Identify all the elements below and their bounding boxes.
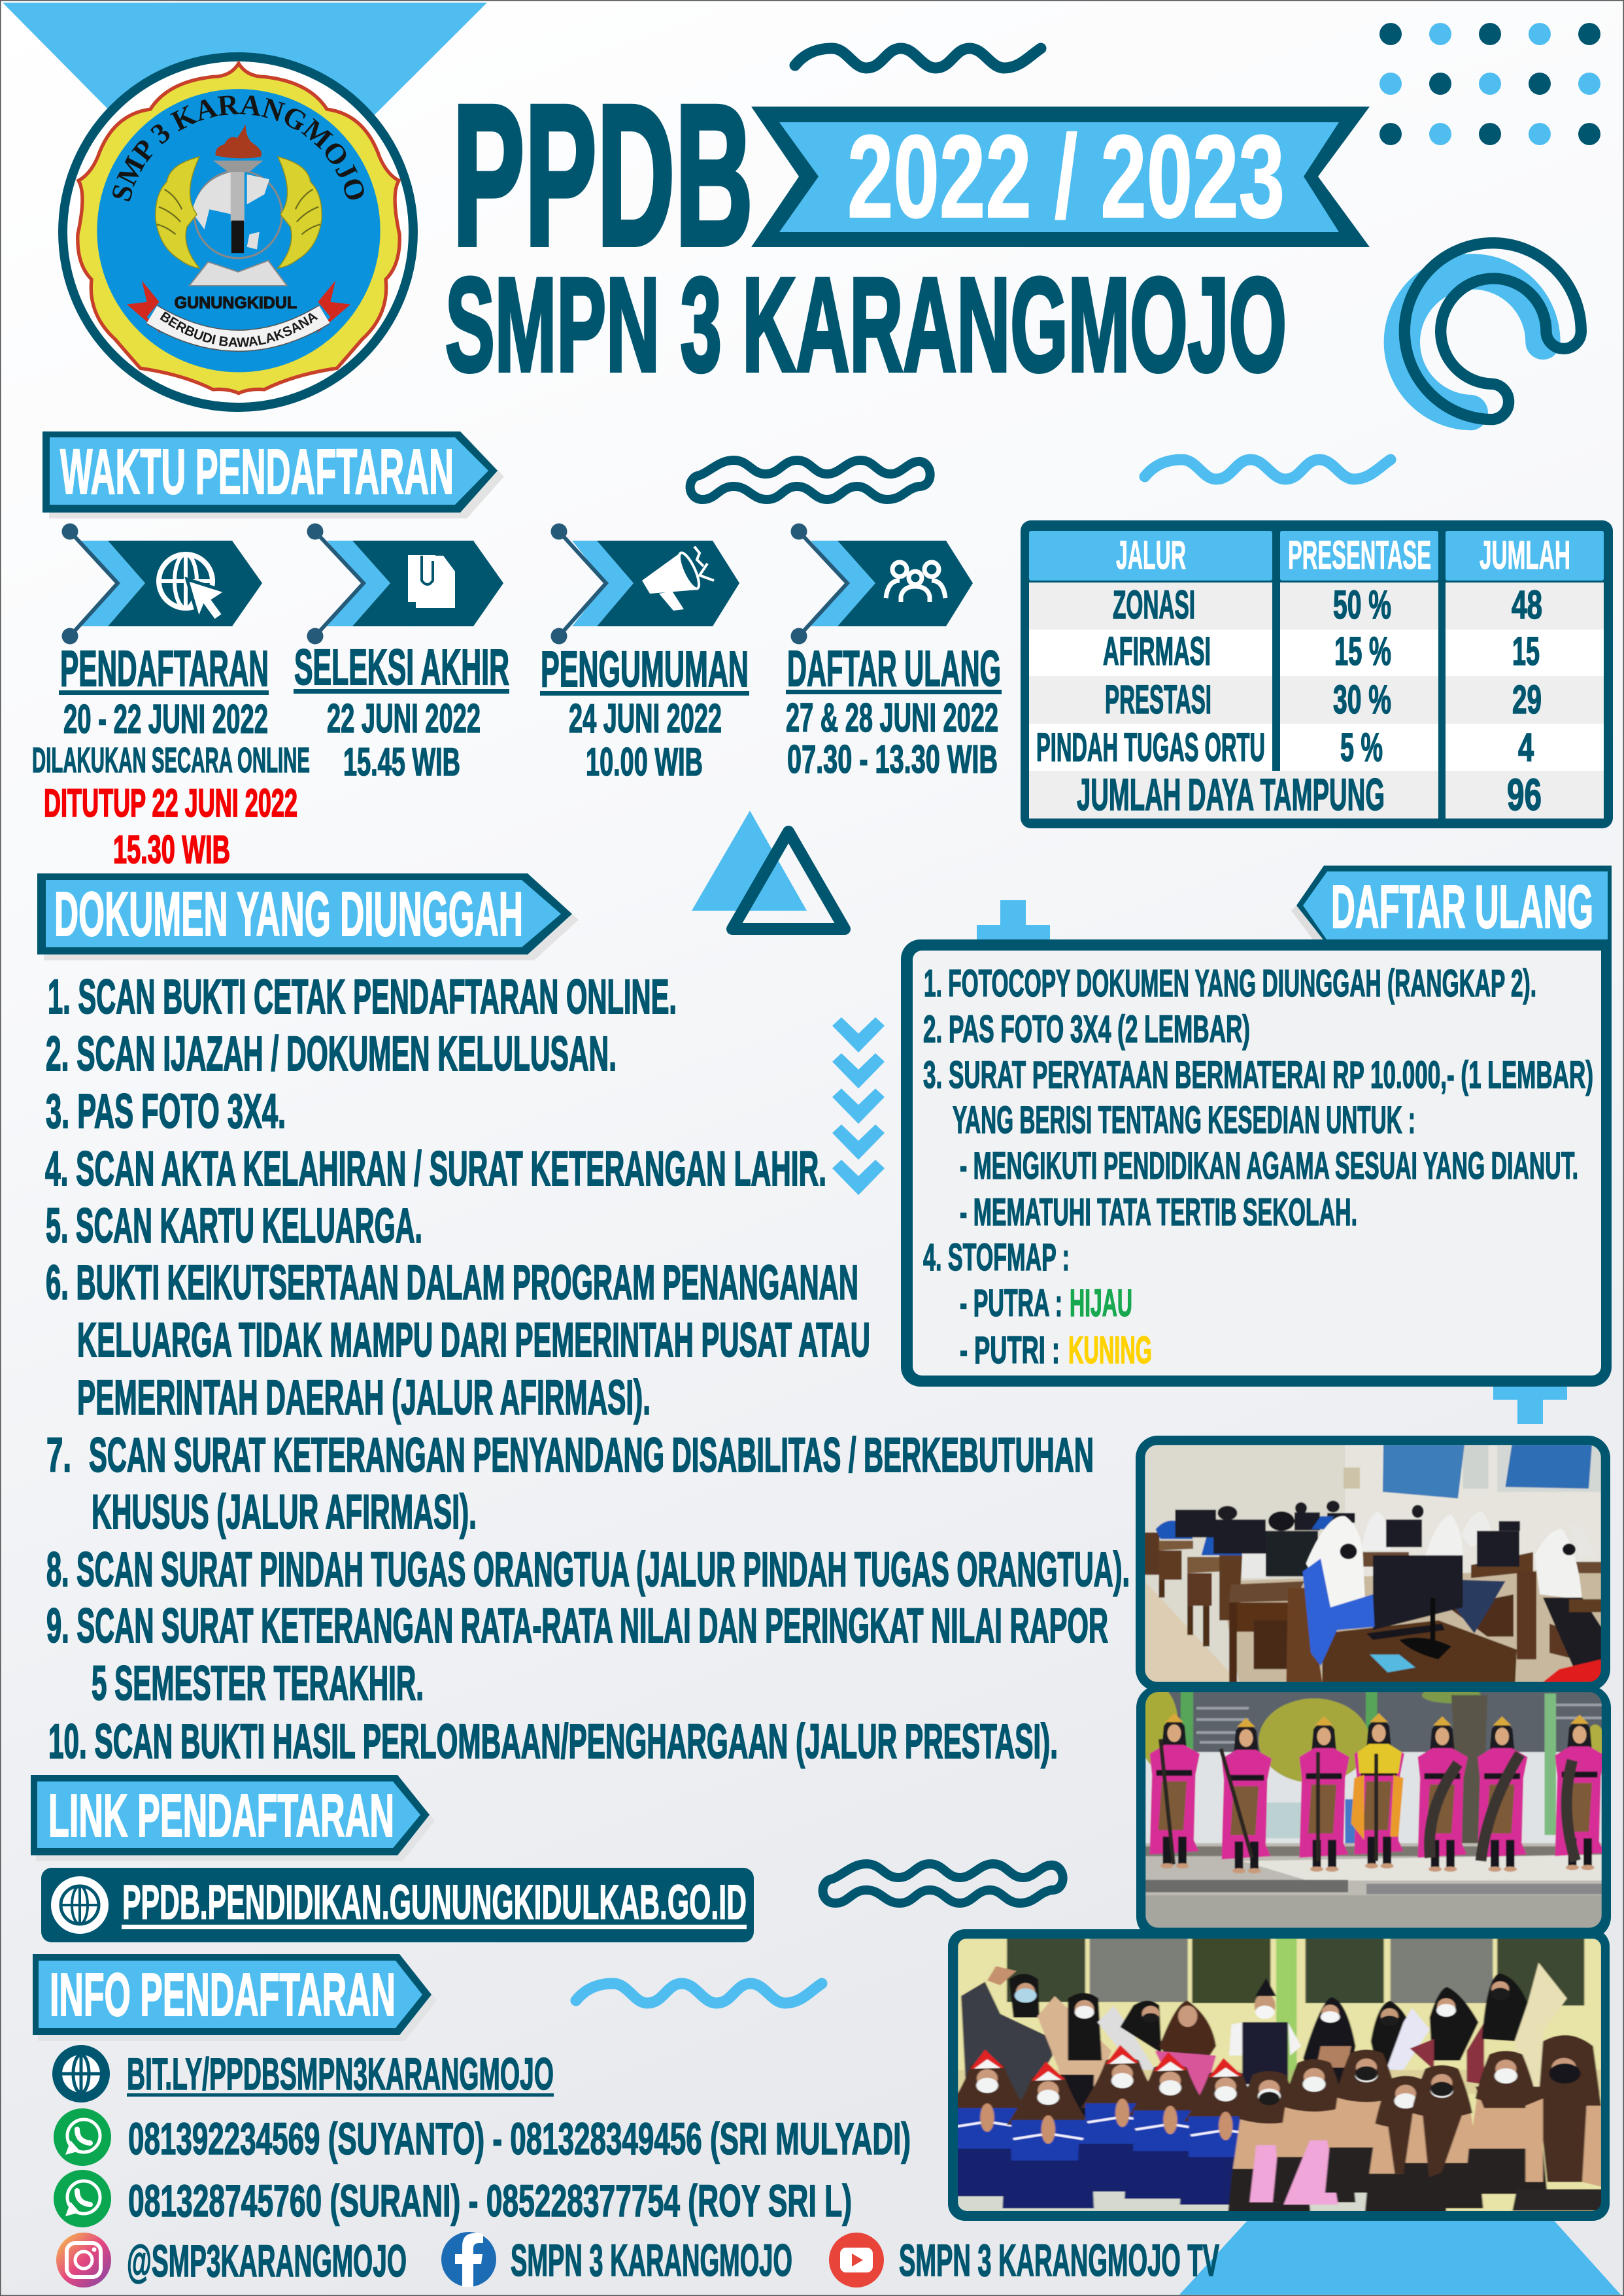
contact: whatsapp 2: 081328745760 (SURANI) - 085228377754 (ROY SRI L)	[128, 2176, 852, 2226]
wave outline: lower	[823, 1864, 1063, 1903]
step 4: daftar ulang	[786, 523, 1002, 781]
document list: 2. SCAN IJAZAH / DOKUMEN KELULUSAN.	[46, 1026, 617, 1081]
step 1 title: PENDAFTARAN	[60, 641, 269, 697]
table rows: PRESTASI	[1105, 677, 1211, 722]
step 3 date: 24 JUNI 2022	[569, 696, 722, 741]
table: jalur quota	[1021, 520, 1613, 828]
logo crest: BERBUDI BAWALAKSANA	[160, 311, 318, 347]
table rows: 4	[1518, 725, 1534, 769]
social: youtube: SMPN 3 KARANGMOJO TV	[899, 2235, 1219, 2286]
document list	[45, 970, 1130, 1768]
chevrons decoration	[832, 1017, 885, 1195]
year ribbon: 2022 / 2023	[847, 111, 1285, 243]
bottom-right trapezoid decoration	[1179, 2216, 1621, 2295]
banner: link pendaftaran: LINK PENDAFTARAN	[48, 1781, 394, 1849]
social: facebook: SMPN 3 KARANGMOJO	[511, 2235, 792, 2286]
top-left triangle decoration	[3, 3, 487, 246]
table rows: 48	[1512, 582, 1542, 627]
icon: globe dark	[52, 2045, 110, 2102]
wave: lower blue	[576, 1984, 822, 2003]
icon: youtube	[829, 2233, 884, 2288]
step 2 chevron	[307, 523, 503, 645]
step 1 chevron	[61, 523, 262, 645]
banner: dokumen yang diunggah: DOKUMEN YANG DIUNGGAH	[54, 879, 523, 949]
icon: megaphone	[642, 547, 714, 611]
photo: traditional dancers	[1139, 1687, 1607, 1928]
social: instagram	[56, 2233, 407, 2288]
panel: daftar ulang requirements	[901, 866, 1612, 1387]
plus decoration bottom	[1493, 1385, 1567, 1424]
step 2 date: 22 JUNI 2022	[327, 696, 481, 741]
contact: whatsapp 1: 081392234569 (SUYANTO) - 081328349456 (SRI MULYADI)	[128, 2114, 911, 2164]
banner: dokumen yang diunggah	[37, 873, 579, 960]
step 4 title: DAFTAR ULANG	[787, 641, 1001, 697]
icon: globe white	[51, 1876, 109, 1934]
table header	[1029, 531, 1604, 581]
icon: whatsapp	[54, 2108, 111, 2166]
step 1 date: 20 - 22 JUNI 2022	[63, 697, 268, 742]
panel list: 4. STOFMAP :	[923, 1236, 1070, 1279]
logo crest	[76, 60, 401, 395]
table header: PRESENTASE	[1288, 533, 1431, 577]
panel list: - MEMATUHI TATA TERTIB SEKOLAH.	[960, 1191, 1357, 1234]
photo frame: dancers	[1136, 1685, 1611, 1939]
banner: waktu pendaftaran: WAKTU PENDAFTARAN	[60, 436, 454, 507]
plus decoration top	[977, 900, 1050, 941]
year ribbon	[751, 107, 1370, 247]
photo: students at computers	[1145, 1445, 1601, 1682]
document list: 1. SCAN BUKTI CETAK PENDAFTARAN ONLINE.	[48, 970, 677, 1024]
url text: PPDB.PENDIDIKAN.GUNUNGKIDULKAB.GO.ID	[122, 1875, 747, 1929]
panel list: - PUTRA :	[960, 1282, 1062, 1325]
contact: bitly link: BIT.LY/PPDBSMPN3KARANGMOJO	[127, 2049, 554, 2099]
step 1 note: DILAKUKAN SECARA ONLINE	[32, 741, 310, 780]
table rows: 50 %	[1333, 582, 1391, 627]
photo frame: group of students	[941, 1929, 1610, 2221]
dot grid	[1379, 23, 1600, 145]
panel list: - PUTRI :	[960, 1329, 1060, 1372]
table rows: 30 %	[1333, 677, 1391, 722]
table rows: 15 %	[1334, 629, 1391, 673]
step 3 date	[569, 696, 722, 784]
table header: JALUR	[1116, 533, 1186, 577]
contact: bitly link	[52, 2045, 554, 2102]
icon: document with clip	[408, 555, 455, 608]
contact: whatsapp 2	[54, 2170, 852, 2227]
spiral decoration	[1384, 243, 1581, 430]
step 3 date: 10.00 WIB	[586, 740, 703, 784]
document list: 7.	[46, 1428, 71, 1482]
table rows: 29	[1512, 677, 1542, 722]
social: youtube	[829, 2233, 1219, 2288]
step 1 closing notice	[44, 781, 297, 871]
panel list	[923, 962, 1593, 1372]
step 3 chevron	[550, 523, 739, 645]
banner: info pendaftaran	[33, 1954, 437, 2041]
step 4 date: 27 & 28 JUNI 2022	[786, 696, 998, 741]
table rows: AFIRMASI	[1103, 629, 1211, 673]
wave: mid blue	[1145, 460, 1391, 479]
document list: KHUSUS (JALUR AFIRMASI).	[92, 1485, 477, 1539]
table rows: JUMLAH DAYA TAMPUNG	[1077, 769, 1385, 820]
step 1 closing notice: 15.30 WIB	[113, 828, 230, 871]
photo: students group	[941, 1939, 1602, 2219]
icon: group of people	[886, 562, 945, 602]
step 2 date	[327, 696, 481, 784]
table rows: ZONASI	[1113, 582, 1195, 627]
banner: waktu pendaftaran	[42, 431, 504, 518]
document list: 5. SCAN KARTU KELUARGA.	[46, 1198, 422, 1253]
logo crest: SMP 3 KARANGMOJO	[112, 95, 364, 201]
panel list: 2. PAS FOTO 3X4 (2 LEMBAR)	[923, 1008, 1250, 1051]
document list: 6. BUKTI KEIKUTSERTAAN DALAM PROGRAM PENANGANAN	[46, 1255, 858, 1309]
heading PPDB: PPDB	[452, 63, 753, 288]
contact: whatsapp 1	[54, 2108, 911, 2166]
icon: instagram	[56, 2233, 111, 2288]
document list: 3. PAS FOTO 3X4.	[46, 1084, 286, 1138]
document list: 5 SEMESTER TERAKHIR.	[92, 1656, 424, 1710]
step 3: pengumuman	[540, 523, 749, 784]
social: instagram: @SMP3KARANGMOJO	[127, 2236, 407, 2286]
social: facebook	[441, 2232, 792, 2287]
document list: KELUARGA TIDAK MAMPU DARI PEMERINTAH PUSAT ATAU	[77, 1313, 870, 1367]
step 4 date	[786, 696, 998, 781]
document list: PEMERINTAH DAERAH (JALUR AFIRMASI).	[77, 1370, 651, 1425]
step 4 date: 07.30 - 13.30 WIB	[787, 737, 998, 781]
step 1 closing notice: DITUTUP 22 JUNI 2022	[44, 781, 297, 825]
table rows: PINDAH TUGAS ORTU	[1036, 725, 1265, 769]
step 1: pendaftaran	[32, 523, 310, 871]
banner: link pendaftaran	[31, 1775, 435, 1861]
url bar	[41, 1868, 754, 1942]
wave outline: mid	[690, 460, 930, 499]
step 2 title: SELEKSI AKHIR	[294, 639, 509, 696]
panel list: KUNING	[1068, 1329, 1152, 1372]
icon: globe with cursor	[159, 554, 226, 621]
step 3 title: PENGUMUMAN	[541, 641, 749, 698]
logo crest: GUNUNGKIDUL	[175, 294, 297, 312]
table rows: 96	[1507, 769, 1542, 820]
triangles decoration	[692, 811, 845, 929]
school logo badge	[58, 52, 418, 412]
step 2: seleksi akhir	[294, 523, 509, 784]
step 4 chevron	[791, 523, 973, 645]
icon: facebook	[441, 2232, 496, 2287]
step 2 date: 15.45 WIB	[343, 740, 460, 784]
document list: 4. SCAN AKTA KELAHIRAN / SURAT KETERANGAN LAHIR.	[45, 1141, 826, 1196]
banner: info pendaftaran: INFO PENDAFTARAN	[50, 1961, 396, 2029]
icon: whatsapp	[54, 2170, 111, 2227]
panel list: HIJAU	[1070, 1282, 1132, 1325]
table rows: 5 %	[1340, 725, 1383, 769]
table rows	[1029, 581, 1604, 820]
table rows: 15	[1512, 629, 1540, 673]
wave: top dark	[795, 48, 1041, 68]
photo frame: computer exam	[1136, 1436, 1610, 1691]
